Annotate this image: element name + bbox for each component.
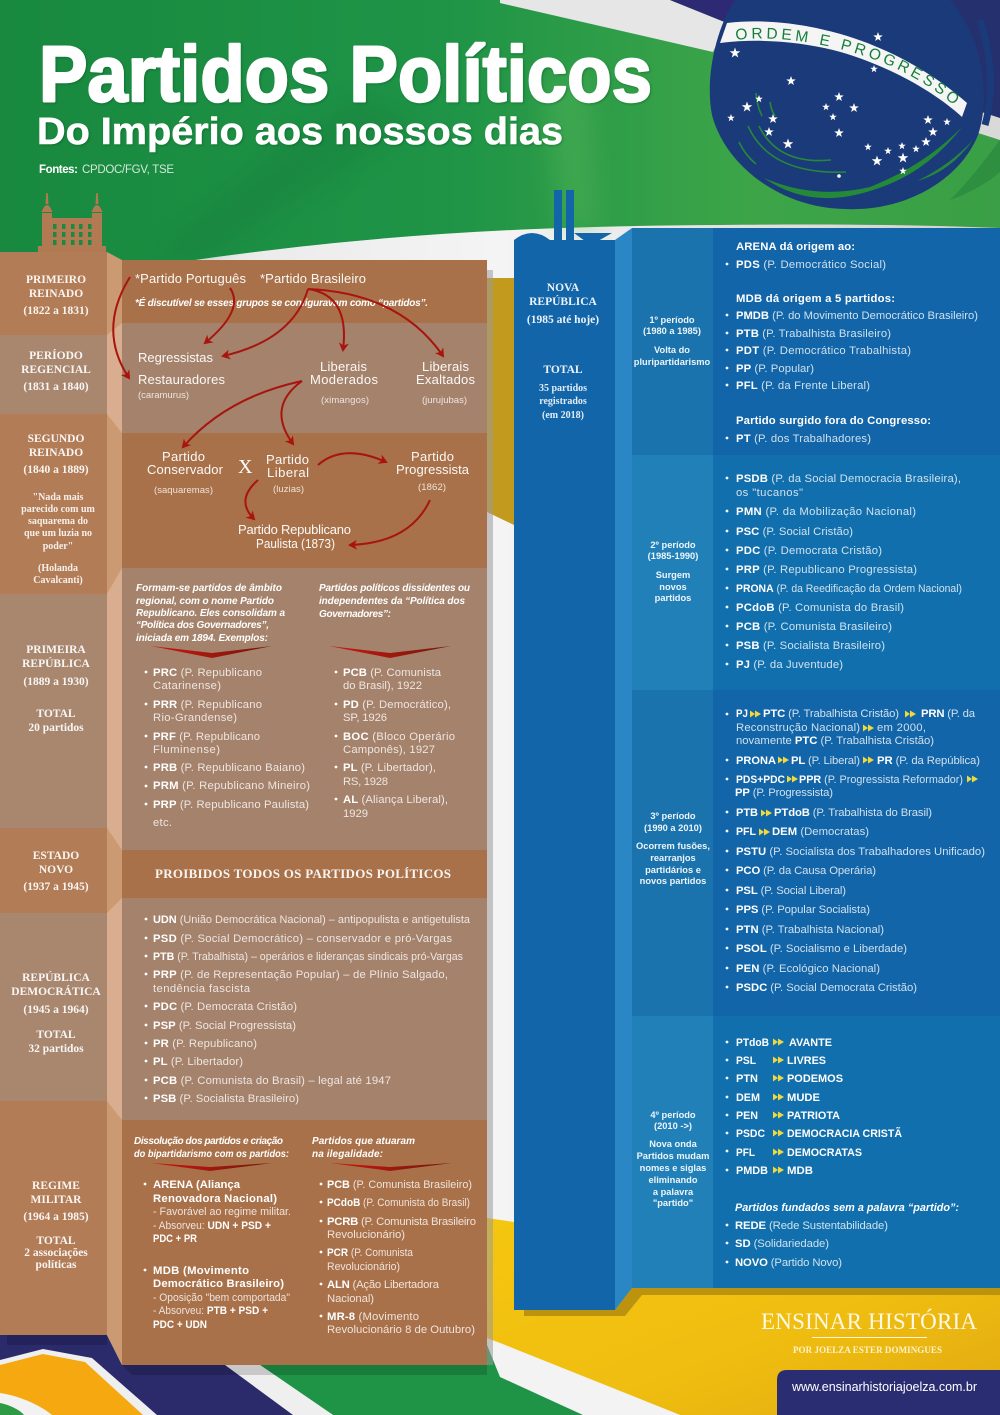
- section: Período Regencial groups: Liberais: [422, 359, 470, 374]
- label: República Democrática: TOTAL: [36, 1029, 76, 1041]
- section: Primeiro Reinado groups: [135, 271, 428, 309]
- label: Regime Militar: MILITAR: [31, 1194, 82, 1206]
- list: illegal parties: Revolucionário 8 de Outubro): [327, 1324, 475, 1336]
- list: 2nd period parties: PRP (P. Republicano Progressista): [736, 564, 917, 576]
- list: 3rd period parties: em 2000,: [877, 722, 926, 734]
- list: dissident parties: do Brasil), 1922: [343, 680, 422, 692]
- list: 4th period parties: DEMOCRATAS: [787, 1147, 862, 1159]
- list: 4th period parties: PMDB: [736, 1165, 768, 1177]
- label: 2nd period: novos: [659, 582, 687, 592]
- section: Período Regencial groups: (jurujubas): [422, 395, 467, 406]
- list: 1st period parties: PTB (P. Trabalhista Brasileiro): [736, 328, 891, 340]
- label: 2nd period: (1985-1990): [648, 551, 698, 561]
- list: illegal parties: PCB (P. Comunista Brasileiro): [327, 1179, 472, 1191]
- label: Regime Militar: 2 associações: [24, 1247, 88, 1259]
- list: 3rd period parties: PSDC (P. Social Democrata Cristão): [736, 982, 917, 994]
- list: 2nd period parties: PJ (P. da Juventude): [736, 659, 843, 671]
- list: 4th period parties: DEMOCRACIA CRISTÃ: [787, 1127, 902, 1140]
- section: Segundo Reinado groups: Conservador: [147, 462, 224, 477]
- label: Segundo Reinado: saquarema do: [28, 516, 88, 527]
- list: República Democrática parties: PDC (P. Democrata Cristão): [153, 1001, 297, 1013]
- chevrons: [151, 1163, 452, 1171]
- section: Período Regencial groups: Exaltados: [416, 372, 476, 387]
- section: Primeira República: [136, 583, 470, 829]
- brand: Ensinar História: [761, 1308, 977, 1355]
- intro text right: independentes da “Política dos: [319, 596, 465, 607]
- label: Primeira República: 20 partidos: [28, 722, 84, 734]
- label: 2nd period: partidos: [655, 593, 691, 603]
- list: ARENA and MDB: - Absorveu: UDN + PSD +: [153, 1220, 271, 1232]
- label: Primeira República: REPÚBLICA: [22, 656, 91, 670]
- list: 3rd period parties: PJ: [736, 708, 748, 720]
- list: República Democrática parties: UDN (União Democrática Nacional) – antipopulista e antigetulista: [153, 914, 471, 926]
- list: dissident parties: BOC (Bloco Operário: [343, 731, 455, 743]
- label: Segundo Reinado: "Nada mais: [33, 492, 84, 503]
- label: Segundo Reinado: SEGUNDO: [28, 433, 84, 445]
- brand: Ensinar História: POR JOELZA ESTER DOMINGUES: [793, 1345, 942, 1355]
- label: Regime Militar: (1964 a 1985): [23, 1211, 89, 1223]
- label: 2nd period: Surgem: [656, 570, 690, 580]
- list: 4th period parties: REDE (Rede Sustentabilidade): [735, 1220, 888, 1232]
- label: 4th period: a palavra: [653, 1187, 694, 1197]
- list: 3rd period parties: PR (P. da República): [877, 755, 980, 767]
- label: 4th period: eliminando: [648, 1175, 698, 1185]
- list: dissident parties: PD (P. Democrático),: [343, 699, 451, 711]
- section: Período Regencial groups: Liberais: [320, 359, 368, 374]
- list: 3rd period parties: PCO (P. da Causa Operária): [736, 865, 876, 877]
- list: 1st period parties: ARENA dá origem ao:: [736, 241, 855, 253]
- section: Segundo Reinado groups: Liberal: [267, 465, 309, 480]
- list: illegal parties: PCdoB (P. Comunista do Brasil): [327, 1197, 470, 1209]
- list: 3rd period parties: PPS (P. Popular Socialista): [736, 904, 870, 916]
- list: ARENA and MDB: Renovadora Nacional): [153, 1193, 277, 1205]
- section: Regime Militar: [134, 1136, 476, 1336]
- section: Segundo Reinado groups: (saquaremas): [154, 485, 213, 496]
- list: regional parties: Catarinense): [153, 680, 221, 692]
- label: Segundo Reinado: REINADO: [29, 447, 83, 459]
- label: 4th period: Nova onda: [649, 1139, 698, 1149]
- label: 3rd period: novos partidos: [640, 876, 706, 886]
- panel: right timeline: [514, 228, 1000, 1310]
- list: 1st period parties: PDS (P. Democrático Social): [736, 259, 886, 271]
- label: 4th period: (2010 ->): [654, 1121, 692, 1131]
- section: Segundo Reinado groups: Partido: [162, 449, 205, 464]
- label: Primeiro Reinado: (1822 a 1831): [23, 305, 89, 317]
- list: regional parties: Fluminense): [153, 744, 220, 756]
- label: Primeiro Reinado: REINADO: [29, 288, 83, 300]
- list: ARENA and MDB: - Oposição "bem comportada": [153, 1292, 290, 1304]
- label: Nova República: REPÚBLICA: [529, 294, 598, 308]
- list: 4th period parties: LIVRES: [787, 1055, 826, 1067]
- list: 3rd period parties: PL (P. Liberal): [791, 755, 860, 767]
- list: dissident parties: AL (Aliança Liberal),: [343, 794, 448, 806]
- stars: [727, 32, 951, 178]
- label: Primeira República: TOTAL: [36, 708, 76, 720]
- list: 2nd period parties: PSB (P. Socialista Brasileiro): [736, 640, 885, 652]
- list: regional parties: [145, 667, 310, 829]
- icons: yellow double arrows: [773, 1038, 784, 1174]
- label: Estado Novo: (1937 a 1945): [23, 881, 89, 893]
- list: regional parties: PRR (P. Republicano: [153, 699, 262, 711]
- label: República Democrática: 32 partidos: [28, 1043, 84, 1055]
- section: Segundo Reinado groups: Paulista (1873): [256, 536, 335, 551]
- list: ARENA and MDB: MDB (Movimento: [153, 1265, 249, 1277]
- list: 4th period parties: PTdoB: [736, 1037, 769, 1049]
- list: 4th period parties: MUDE: [787, 1092, 820, 1104]
- section: Segundo Reinado groups: Partido Republicano: [238, 522, 351, 537]
- list: 4th period parties: PSL: [736, 1055, 756, 1067]
- list: República Democrática parties: PSP (P. Social Progressista): [153, 1020, 296, 1032]
- label: Estado Novo: NOVO: [39, 864, 73, 876]
- intro text left: regional, com o nome Partido: [136, 596, 274, 607]
- list: ARENA and MDB: [144, 1179, 291, 1331]
- label: 4th period: "partido": [653, 1198, 693, 1208]
- list: illegal parties: Revolucionário): [327, 1229, 405, 1241]
- intro text right: Partidos políticos dissidentes ou: [319, 583, 470, 594]
- website banner: www.ensinarhistoriajoelza.com.br: [791, 1380, 977, 1394]
- section: Período Regencial groups: Moderados: [310, 372, 378, 387]
- label: Nova República: NOVA: [547, 282, 580, 294]
- list: 2nd period parties: PCdoB (P. Comunista do Brasil): [736, 602, 904, 614]
- section: Segundo Reinado groups: Progressista: [396, 462, 470, 477]
- list: 2nd period parties: PRONA (P. da Reedificação da Ordem Nacional): [736, 583, 962, 595]
- website banner: [777, 1370, 1000, 1415]
- list: regional parties: Rio-Grandense): [153, 712, 237, 724]
- label: República Democrática: REPÚBLICA: [22, 970, 91, 984]
- list: regional parties: PRM (P. Republicano Mineiro): [153, 780, 310, 792]
- subtitle: Do Império aos nossos dias: [37, 111, 563, 153]
- list: 3rd period parties: PRN (P. da: [921, 708, 976, 720]
- list: ARENA and MDB: PDC + UDN: [153, 1319, 207, 1331]
- list: dissident parties: SP, 1926: [343, 712, 387, 724]
- list: 2nd period parties: PDC (P. Democrata Cristão): [736, 545, 882, 557]
- label: Segundo Reinado: parecido com um: [21, 504, 96, 515]
- title: Partidos Políticos: [39, 29, 652, 118]
- section: Primeiro Reinado groups: *É discutível se esses grupos se configuravam como “partidos”.: [135, 296, 428, 309]
- list: República Democrática parties: [145, 914, 471, 1105]
- intro text left: Dissolução dos partidos e criação: [134, 1136, 283, 1147]
- label: Primeiro Reinado: PRIMEIRO: [26, 274, 86, 286]
- list: 3rd period parties: Reconstrução Nacional): [736, 722, 860, 734]
- list: 4th period parties: Partidos fundados sem a palavra “partido”:: [735, 1202, 959, 1214]
- section: Segundo Reinado groups: [147, 449, 470, 551]
- list: illegal parties: [320, 1179, 476, 1336]
- list: 3rd period parties: novamente PTC (P. Trabalhista Cristão): [736, 735, 934, 747]
- label: 1st period: (1980 a 1985): [643, 326, 701, 336]
- intro text right: Governadores”:: [319, 609, 391, 620]
- label: Primeira República: PRIMEIRA: [26, 644, 86, 656]
- label: 3rd period: 3º período: [650, 811, 696, 821]
- label: Regime Militar: REGIME: [32, 1180, 80, 1192]
- label: 1st period: [634, 315, 711, 367]
- label: Segundo Reinado: Cavalcanti): [33, 575, 83, 586]
- label: Segundo Reinado: (Holanda: [38, 563, 78, 574]
- list: 4th period parties: PATRIOTA: [787, 1110, 840, 1122]
- intro text right: Partidos que atuaram: [312, 1136, 415, 1147]
- section: Segundo Reinado groups: X: [238, 456, 253, 478]
- sources: CPDOC/FGV, TSE: [82, 164, 174, 176]
- intro text left: “Política dos Governadores”,: [136, 620, 269, 631]
- list: 3rd period parties: PFL: [736, 826, 756, 838]
- list: 3rd period parties: PTN (P. Trabalhista Nacional): [736, 924, 884, 936]
- list: República Democrática parties: PSD (P. Social Democrático) – conservador e pró-Vargas: [153, 933, 452, 945]
- intro text left: do bipartidarismo com os partidos:: [134, 1149, 289, 1160]
- list: 4th period parties: AVANTE: [789, 1037, 832, 1049]
- list: 4th period parties: PSDC: [736, 1128, 765, 1140]
- sources: [39, 164, 174, 176]
- sources: Fontes:: [39, 164, 78, 176]
- section: Segundo Reinado groups: Partido: [411, 449, 454, 464]
- list: ARENA and MDB: - Absorveu: PTB + PSD +: [153, 1305, 268, 1317]
- section: Segundo Reinado groups: Partido: [266, 452, 309, 467]
- label: Período Regencial: [21, 348, 91, 393]
- list: 1st period parties: PDT (P. Democrático Trabalhista): [736, 345, 911, 357]
- list: 3rd period parties: PSOL (P. Socialismo e Liberdade): [736, 943, 907, 955]
- list: República Democrática parties: PR (P. Republicano): [153, 1038, 257, 1050]
- label: Período Regencial: PERÍODO: [29, 348, 83, 362]
- label: 1st period: pluripartidarismo: [634, 357, 711, 367]
- list: regional parties: PRP (P. Republicano Paulista): [153, 799, 309, 811]
- section: Período Regencial groups: [138, 350, 476, 406]
- list: República Democrática parties: tendência fascista: [153, 983, 251, 995]
- list: dissident parties: PCB (P. Comunista: [343, 667, 442, 679]
- list: regional parties: PRC (P. Republicano: [153, 667, 262, 679]
- list: 1st period parties: PP (P. Popular): [736, 363, 814, 375]
- label: Regime Militar: políticas: [36, 1259, 77, 1271]
- list: 3rd period parties: PSL (P. Social Liberal): [736, 885, 846, 897]
- list: 4th period parties: PEN: [736, 1110, 758, 1122]
- label: Período Regencial: REGENCIAL: [21, 364, 91, 376]
- label: 3rd period: Ocorrem fusões,: [636, 841, 710, 851]
- list: 4th period parties: [726, 1037, 959, 1269]
- label: Segundo Reinado: poder": [43, 541, 73, 552]
- list: 3rd period parties: [726, 708, 985, 994]
- label: Nova República: TOTAL: [543, 364, 583, 376]
- list: 1st period parties: PT (P. dos Trabalhadores): [736, 433, 871, 445]
- list: 2nd period parties: PSC (P. Social Cristão): [736, 526, 853, 538]
- list: 3rd period parties: PDS+PDC: [736, 774, 785, 786]
- list: 1st period parties: [726, 241, 978, 445]
- label: 3rd period: partidários e: [645, 865, 701, 875]
- brand: Ensinar História: ENSINAR HISTÓRIA: [761, 1308, 977, 1334]
- list: República Democrática parties: PL (P. Libertador): [153, 1056, 243, 1068]
- label: Nova República: (em 2018): [542, 410, 584, 421]
- list: 1st period parties: PFL (P. da Frente Liberal): [736, 380, 870, 392]
- list: dissident parties: PL (P. Libertador),: [343, 762, 436, 774]
- list: 1st period parties: PMDB (P. do Movimento Democrático Brasileiro): [736, 310, 978, 322]
- section: Período Regencial groups: (ximangos): [321, 395, 369, 406]
- label: Segundo Reinado: [21, 433, 96, 586]
- label: Primeiro Reinado: [23, 274, 89, 317]
- list: dissident parties: Camponês), 1927: [343, 744, 435, 756]
- list: 4th period parties: PFL: [736, 1147, 755, 1159]
- list: 2nd period parties: PCB (P. Comunista Brasileiro): [736, 621, 892, 633]
- label: 4th period: nomes e siglas: [640, 1163, 706, 1173]
- label: Nova República: registrados: [539, 396, 587, 407]
- label: Primeira República: (1889 a 1930): [23, 676, 89, 688]
- list: dissident parties: RS, 1928: [343, 776, 388, 788]
- label: Período Regencial: (1831 a 1840): [23, 381, 89, 393]
- label: 2nd period: 2º período: [650, 540, 696, 550]
- label: Regime Militar: TOTAL: [36, 1235, 76, 1247]
- list: dissident parties: [335, 667, 455, 820]
- list: 3rd period parties: PEN (P. Ecológico Nacional): [736, 963, 880, 975]
- intro text left: [136, 583, 285, 644]
- label: 4th period: [637, 1110, 709, 1208]
- list: 2nd period parties: [726, 473, 962, 671]
- list: 3rd period parties: DEM (Democratas): [772, 826, 869, 838]
- list: regional parties: etc.: [153, 817, 172, 829]
- heading: Estado Novo ban: PROIBIDOS TODOS OS PARTIDOS POLÍTICOS: [155, 866, 451, 881]
- label: Primeira República: [22, 644, 91, 734]
- label: 1st period: 1º período: [649, 315, 695, 325]
- list: 3rd period parties: PP (P. Progressista): [735, 787, 833, 799]
- label: Estado Novo: ESTADO: [33, 850, 79, 862]
- list: 3rd period parties: PTdoB (P. Trabalhista do Brasil): [774, 807, 932, 819]
- list: 1st period parties: MDB dá origem a 5 partidos:: [736, 293, 895, 305]
- label: Regime Militar: [23, 1180, 89, 1271]
- list: 4th period parties: NOVO (Partido Novo): [735, 1257, 842, 1269]
- section: Período Regencial groups: Regressistas: [138, 350, 214, 365]
- list: República Democrática parties: PSB (P. Socialista Brasileiro): [153, 1093, 299, 1105]
- list: illegal parties: PCRB (P. Comunista Brasileiro: [327, 1216, 476, 1228]
- list: ARENA and MDB: - Favorável ao regime militar.: [153, 1206, 291, 1218]
- label: Estado Novo: [23, 850, 89, 893]
- intro text right: [312, 1136, 415, 1160]
- list: 3rd period parties: PPR (P. Progressista Reformador): [799, 774, 963, 786]
- label: 2nd period: [648, 540, 698, 603]
- list: 2nd period parties: os "tucanos": [736, 487, 803, 499]
- list: República Democrática parties: PRP (P. de Representação Popular) – de Plínio Salgado,: [153, 969, 448, 981]
- list: 4th period parties: SD (Solidariedade): [735, 1238, 829, 1250]
- list: illegal parties: PCR (P. Comunista: [327, 1247, 414, 1259]
- label: 4th period: 4º período: [650, 1110, 696, 1120]
- list: regional parties: PRB (P. Republicano Baiano): [153, 762, 305, 774]
- section: Período Regencial groups: (caramurus): [138, 390, 189, 401]
- section: Segundo Reinado groups: (luzias): [273, 484, 304, 495]
- list: ARENA and MDB: Democrático Brasileiro): [153, 1278, 284, 1290]
- list: illegal parties: Nacional): [327, 1293, 374, 1305]
- list: 1st period parties: Partido surgido fora do Congresso:: [736, 415, 931, 427]
- arrows: party lineage: [113, 277, 443, 545]
- label: 1st period: Volta do: [654, 345, 690, 355]
- label: Nova República: [527, 282, 599, 421]
- section: Primeiro Reinado groups: *Partido Brasileiro: [260, 271, 366, 286]
- list: 3rd period parties: PRONA: [736, 755, 776, 767]
- list: illegal parties: Revolucionário): [327, 1261, 400, 1273]
- section: Primeiro Reinado groups: *Partido Português: [135, 271, 246, 286]
- intro text right: [319, 583, 470, 620]
- label: 3rd period: rearranjos: [650, 853, 696, 863]
- icons: yellow double arrows: [750, 710, 978, 836]
- list: 4th period parties: PODEMOS: [787, 1073, 843, 1085]
- icon: national congress: [514, 190, 612, 242]
- chevrons: [151, 646, 451, 658]
- list: 3rd period parties: PTC (P. Trabalhista Cristão): [763, 708, 899, 720]
- intro text right: na ilegalidade:: [312, 1149, 383, 1160]
- list: dissident parties: 1929: [343, 808, 368, 820]
- label: 3rd period: (1990 a 2010): [644, 823, 702, 833]
- section: Período Regencial groups: Restauradores: [138, 372, 226, 387]
- list: 4th period parties: PTN: [736, 1073, 758, 1085]
- label: Segundo Reinado: que um luzia no: [24, 528, 92, 539]
- label: República Democrática: DEMOCRÁTICA: [11, 984, 101, 998]
- label: 4th period: Partidos mudam: [637, 1151, 709, 1161]
- list: 2nd period parties: PSDB (P. da Social Democracia Brasileira),: [736, 473, 961, 485]
- list: ARENA and MDB: PDC + PR: [153, 1233, 197, 1245]
- list: 2nd period parties: PMN (P. da Mobilização Nacional): [736, 506, 916, 518]
- label: República Democrática: (1945 a 1964): [23, 1004, 89, 1016]
- label: Nova República: (1985 até hoje): [527, 314, 599, 326]
- list: República Democrática parties: PCB (P. Comunista do Brasil) – legal até 1947: [153, 1075, 391, 1087]
- label: 3rd period: [636, 811, 710, 886]
- list: regional parties: PRF (P. Republicano: [153, 731, 260, 743]
- intro text left: Republicano. Eles consolidam a: [136, 608, 285, 619]
- intro text left: Formam-se partidos de âmbito: [136, 583, 282, 594]
- list: República Democrática parties: PTB (P. Trabalhista) – operários e lideranças sindicais pró-Vargas: [153, 951, 463, 963]
- section: Segundo Reinado groups: (1862): [418, 482, 446, 493]
- motto: ORDEM E PROGRESSO: [736, 28, 958, 103]
- list: illegal parties: MR-8 (Movimento: [327, 1311, 419, 1323]
- list: 3rd period parties: PTB: [736, 807, 758, 819]
- shadow under right panel: [524, 1288, 1000, 1316]
- list: ARENA and MDB: ARENA (Aliança: [153, 1179, 241, 1191]
- intro text left: iniciada em 1894. Exemplos:: [136, 633, 268, 644]
- intro text left: [134, 1136, 289, 1160]
- label: Nova República: 35 partidos: [539, 383, 587, 394]
- icon: imperial palace tower: [38, 193, 106, 254]
- flag globe with motto and stars: [710, 0, 1000, 210]
- list: 3rd period parties: PSTU (P. Socialista dos Trabalhadores Unificado): [736, 846, 985, 858]
- list: 4th period parties: MDB: [787, 1165, 813, 1177]
- panel: left timeline: [0, 252, 487, 1365]
- list: illegal parties: ALN (Ação Libertadora: [327, 1279, 440, 1291]
- list: 4th period parties: DEM: [736, 1092, 760, 1104]
- label: Segundo Reinado: (1840 a 1889): [23, 464, 89, 476]
- label: República Democrática: [11, 970, 101, 1055]
